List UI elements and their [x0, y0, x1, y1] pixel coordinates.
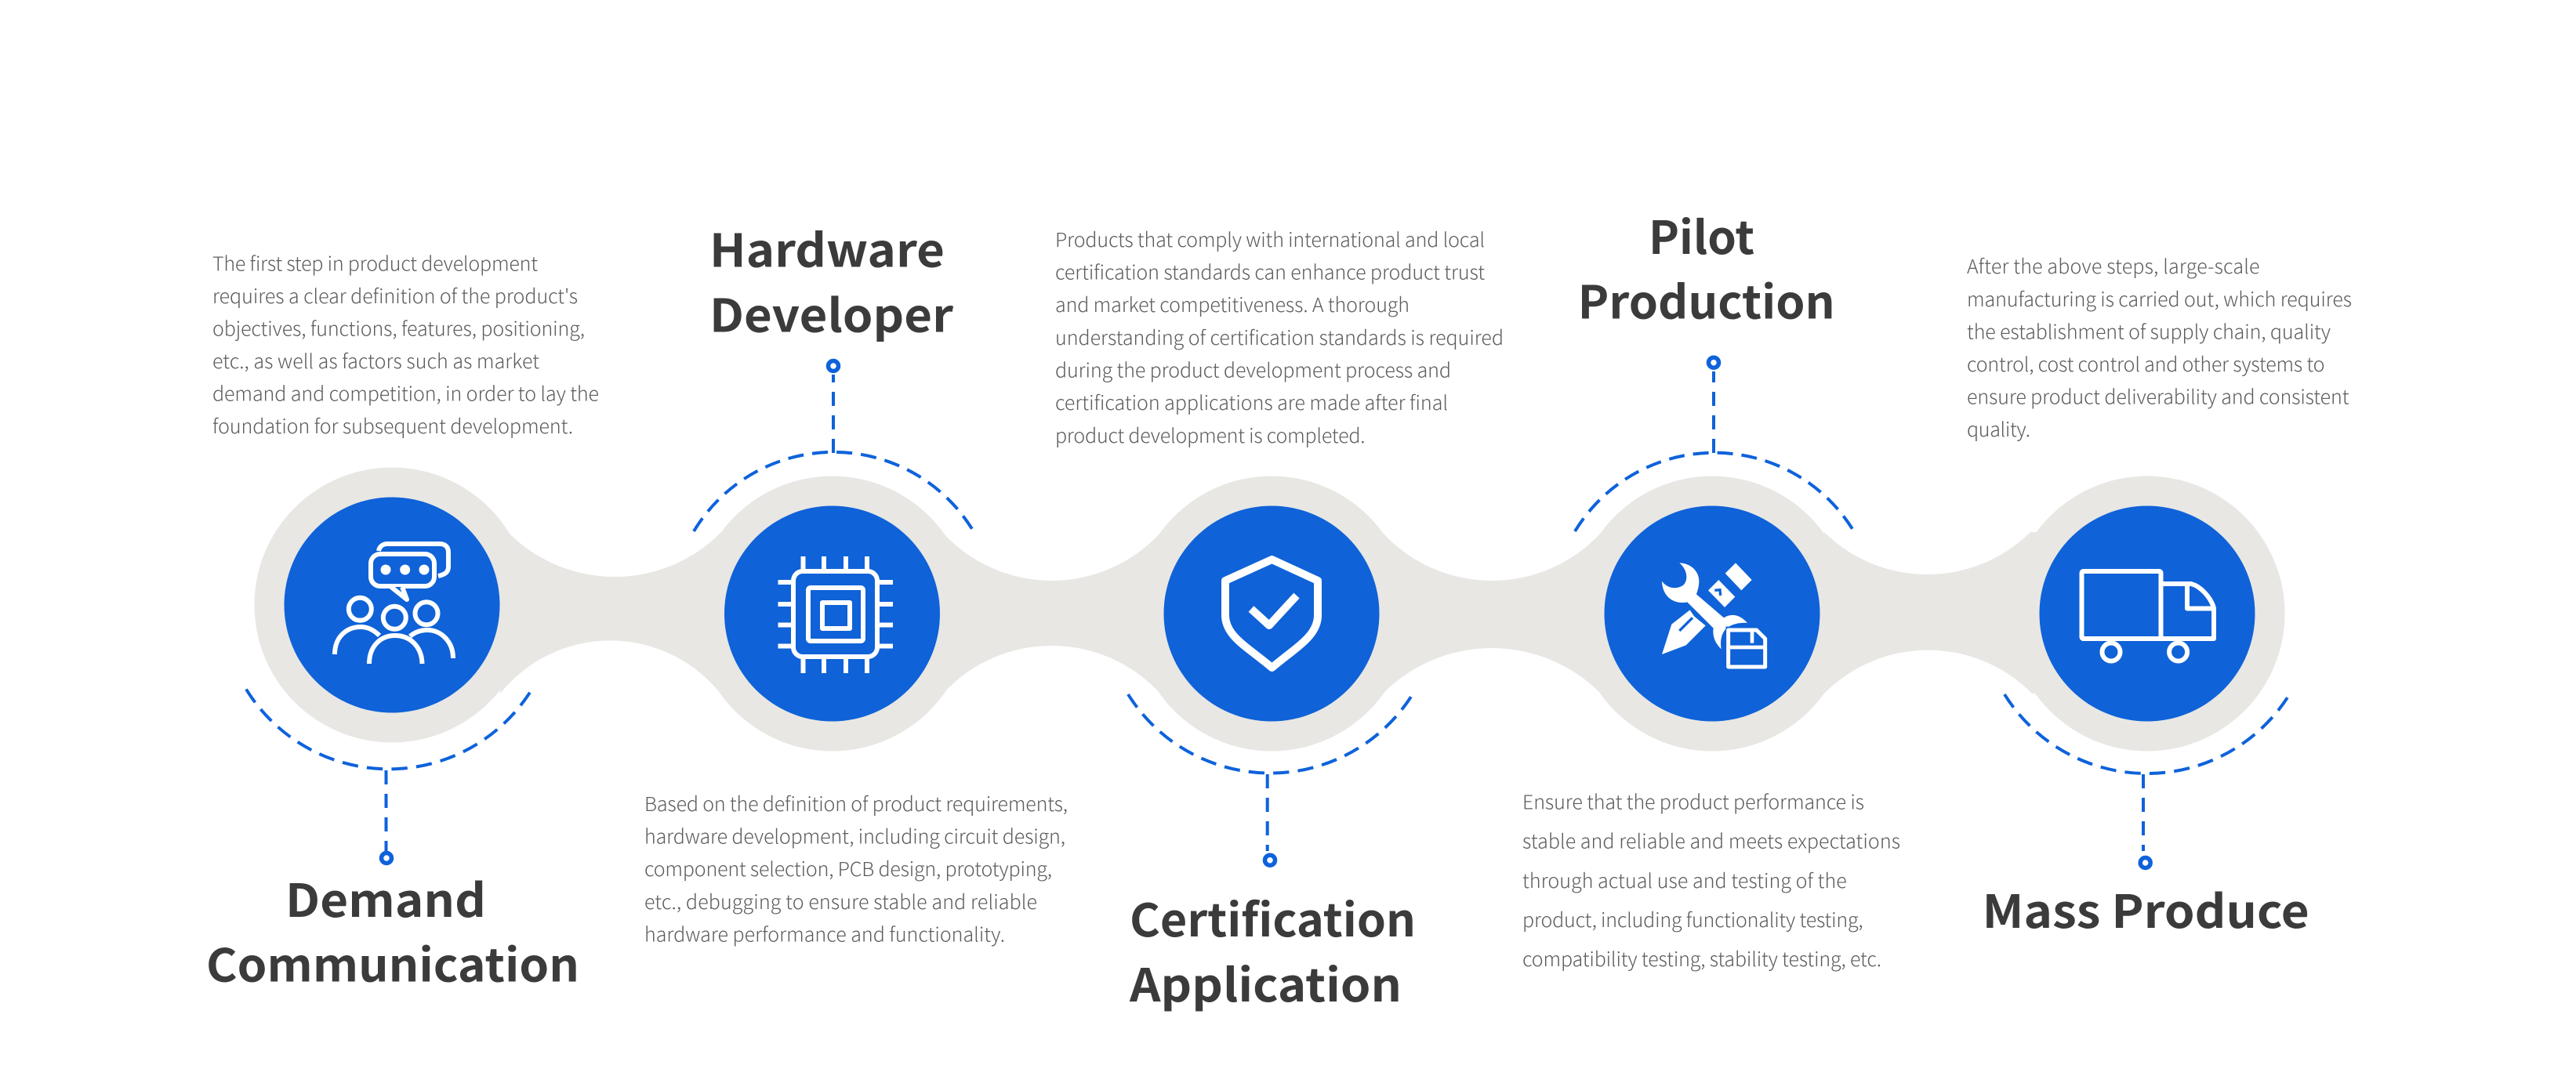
- description: step 4: product, including functionality testing,: [1522, 905, 1863, 933]
- heading: Hardware Developer: [709, 215, 954, 345]
- description: step 5: manufacturing is carried out, which requires: [1967, 284, 2352, 313]
- dashed leader line: [2142, 774, 2145, 851]
- dashed leader line: [384, 770, 387, 851]
- description: step 5: ensure product deliverability and consistent: [1967, 382, 2349, 411]
- heading: Certification Application: [1129, 884, 1416, 1015]
- description: step 4: stable and reliable and meets expectations: [1522, 827, 1900, 855]
- description: step 2: hardware development, including circuit design,: [644, 822, 1065, 850]
- step 4: Pilot Production: [1522, 201, 1900, 973]
- heading: Pilot Production: Pilot: [1649, 201, 1754, 267]
- icon: delivery truck: [2082, 571, 2214, 661]
- description: step 3: understanding of certification standards is required: [1055, 323, 1504, 351]
- description: step 3: during the product development process and: [1055, 356, 1451, 384]
- description: step 3: Products that comply with international and local: [1055, 225, 1485, 253]
- description: step 2: Based on the definition of product requirements,: [644, 789, 1068, 817]
- step 2: Hardware Developer: [644, 215, 1068, 948]
- description: step 2: [644, 789, 1068, 948]
- dashed leader line: [832, 375, 835, 453]
- dashed leader line: [1712, 371, 1715, 453]
- description: step 1: objectives, functions, features, positioning,: [212, 313, 585, 342]
- marker dot: [381, 853, 392, 864]
- heading: Pilot Production: [1578, 201, 1835, 332]
- dashed arc: [2005, 694, 2288, 773]
- description: step 1: requires a clear definition of the product's: [212, 281, 578, 310]
- heading: Demand Communication: Demand: [285, 864, 486, 930]
- description: step 4: Ensure that the product performance is: [1522, 788, 1864, 816]
- description: step 5: control, cost control and other systems to: [1967, 350, 2325, 378]
- heading: Certification Application: Application: [1129, 949, 1402, 1015]
- description: step 1: [212, 249, 599, 440]
- gray connector band: [254, 467, 2284, 751]
- description: step 1: foundation for subsequent development.: [212, 411, 573, 440]
- description: step 5: the establishment of supply chain, quality: [1967, 317, 2331, 345]
- heading: Hardware Developer: Developer: [709, 279, 954, 345]
- dashed arc: [694, 452, 972, 531]
- heading: Pilot Production: Production: [1578, 266, 1835, 332]
- marker dot: [828, 360, 839, 371]
- marker dot: [1265, 855, 1275, 865]
- dashed arc: [1575, 453, 1852, 531]
- description: step 3: product development is completed.: [1055, 421, 1366, 449]
- step 1: Demand Communication: [206, 249, 599, 995]
- blue circle: [1163, 506, 1380, 721]
- step 5: Mass Produce: [1967, 252, 2352, 941]
- description: step 4: compatibility testing, stability testing, etc.: [1522, 944, 1881, 973]
- description: step 3: certification applications are made after final: [1055, 388, 1448, 416]
- description: step 2: etc., debugging to ensure stable and reliable: [644, 887, 1037, 915]
- icon: tools and floppy disk: [1662, 563, 1765, 667]
- heading: Demand Communication: [206, 864, 579, 995]
- description: step 5: [1967, 252, 2352, 443]
- description: step 4: [1522, 788, 1900, 973]
- description: step 4: through actual use and testing of the: [1522, 866, 1847, 894]
- heading: Demand Communication: Communication: [206, 929, 579, 995]
- blue circle: [2040, 506, 2255, 721]
- icon: chip: [778, 556, 893, 673]
- icon: shield with check: [1225, 560, 1318, 668]
- blue circle: [724, 506, 940, 721]
- marker dot: [1709, 357, 1718, 368]
- heading: Mass Produce: Mass Produce: [1983, 875, 2309, 941]
- description: step 1: etc., as well as factors such as market: [212, 346, 539, 375]
- description: step 3: [1055, 225, 1504, 449]
- description: step 3: certification standards can enhance product trust: [1055, 258, 1485, 286]
- description: step 1: demand and competition, in order to lay the: [212, 379, 599, 407]
- blue circle: [284, 497, 500, 713]
- heading: Hardware Developer: Hardware: [709, 215, 945, 281]
- dashed leader line: [1266, 774, 1269, 851]
- description: step 3: and market competitiveness. A thorough: [1055, 290, 1410, 318]
- description: step 2: hardware performance and functionality.: [644, 920, 1005, 948]
- dashed arc: [246, 690, 530, 769]
- description: step 2: component selection, PCB design, prototyping,: [644, 854, 1052, 882]
- icon: people with speech bubble: [335, 544, 453, 664]
- description: step 1: The first step in product development: [212, 249, 538, 277]
- heading: Certification Application: Certification: [1130, 884, 1416, 950]
- step 3: Certification Application: [1055, 225, 1504, 1015]
- dashed arc: [1128, 694, 1411, 773]
- marker dot: [2140, 857, 2150, 868]
- blue circle: [1604, 506, 1820, 721]
- description: step 5: After the above steps, large-scale: [1967, 252, 2259, 280]
- description: step 5: quality.: [1967, 415, 2030, 443]
